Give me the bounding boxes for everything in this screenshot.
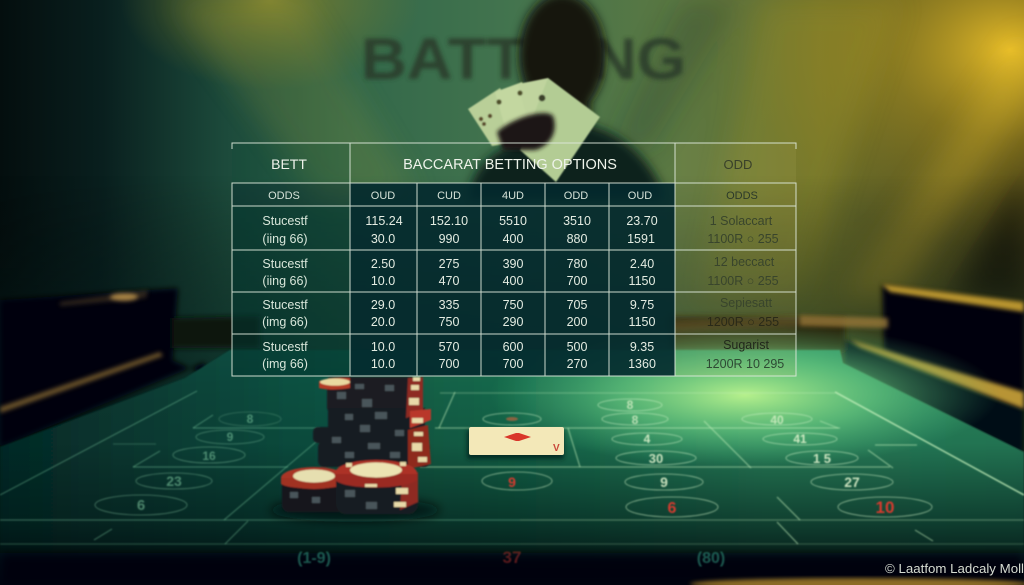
odds values: 3510 <box>563 214 591 228</box>
felt number markers: 23 <box>166 473 182 489</box>
row labels <box>262 214 308 371</box>
odds values: 2.40 <box>630 257 654 271</box>
table header row: BACCARAT BETTING OPTIONS <box>403 157 617 173</box>
felt number markers: 4 <box>644 432 651 446</box>
odds values: 115.24 <box>365 214 403 228</box>
felt number markers: 30 <box>649 451 663 466</box>
row labels: (img 66) <box>262 315 308 329</box>
odds values: 152.10 <box>430 214 468 228</box>
table subheader row: 4UD <box>502 190 524 202</box>
felt number markers: 41 <box>793 432 807 446</box>
odds values: 570 <box>439 340 459 354</box>
felt number markers: 9 <box>227 430 234 444</box>
odds values: 600 <box>503 340 523 354</box>
odds values: 400 <box>503 232 523 246</box>
right column details: 1200R 10 295 <box>706 357 784 371</box>
felt number markers: 9 <box>660 474 668 490</box>
odds values: 2.50 <box>371 257 395 271</box>
copyright watermark: © Laatfom Ladcaly Moll <box>885 562 1024 576</box>
felt number markers: 27 <box>844 474 860 490</box>
odds values: 750 <box>439 315 459 329</box>
odds values: 700 <box>439 357 459 371</box>
small front chip stack <box>281 467 347 512</box>
row labels: Stucestf <box>262 214 308 228</box>
odds values: 30.0 <box>371 232 395 246</box>
right column details: 12 beccact <box>714 255 775 269</box>
felt number markers: (1-9) <box>297 550 331 567</box>
table subheader row <box>268 190 758 202</box>
felt number markers: 1 5 <box>813 451 831 466</box>
icon: red diamond pip <box>504 433 531 441</box>
table subheader row: OUD <box>371 190 395 202</box>
odds values: 9.35 <box>630 340 654 354</box>
row labels: Stucestf <box>262 298 308 312</box>
felt number markers: 6 <box>137 497 145 514</box>
right column details <box>706 214 784 371</box>
table subheader row: ODDS <box>268 190 300 202</box>
odds values <box>365 214 658 371</box>
felt number markers: 8 <box>627 398 634 412</box>
odds values: 780 <box>567 257 587 271</box>
odds values: 700 <box>567 274 587 288</box>
felt number markers: (80) <box>697 550 725 567</box>
table subheader row: ODDS <box>726 190 758 202</box>
blurred wall lettering: BATTOING <box>361 27 686 92</box>
playing card on the table: V <box>553 443 560 454</box>
table subheader row: OUD <box>628 190 652 202</box>
felt table surface <box>0 323 1024 585</box>
odds values: 1150 <box>629 274 655 288</box>
odds values: 290 <box>503 315 523 329</box>
felt betting layout lines: left side <box>0 391 520 544</box>
odds values: 750 <box>503 298 523 312</box>
odds values: 20.0 <box>371 315 395 329</box>
front chip stack with cream top <box>335 460 418 514</box>
felt number markers: 9 <box>508 474 516 490</box>
odds values: 275 <box>439 257 459 271</box>
right column details: 1100R ○ 255 <box>707 274 779 288</box>
odds values: 10.0 <box>371 357 395 371</box>
right column details: Sepiesatt <box>720 296 773 310</box>
table panel fills <box>232 143 796 376</box>
tall chip stack <box>313 377 431 469</box>
felt number markers: 8 <box>632 413 639 427</box>
dealer silhouette holding cards <box>468 0 662 200</box>
odds values: 200 <box>567 315 587 329</box>
felt number markers: 8 <box>247 412 254 426</box>
felt number markers: 6 <box>668 500 677 517</box>
odds values: 705 <box>567 298 587 312</box>
odds values: 29.0 <box>371 298 395 312</box>
felt number markers: 10 <box>876 498 894 517</box>
odds values: 880 <box>567 232 587 246</box>
table grid <box>232 143 796 376</box>
table subheader row: CUD <box>437 190 461 202</box>
odds values: 400 <box>503 274 523 288</box>
odds values: 700 <box>503 357 523 371</box>
odds values: 1360 <box>628 357 656 371</box>
row labels: (img 66) <box>262 357 308 371</box>
odds values: 500 <box>567 340 587 354</box>
right column details: 1100R ○ 255 <box>707 232 779 246</box>
playing card on the table <box>467 427 564 459</box>
odds values: 270 <box>567 357 587 371</box>
right column details: 1200R ○ 255 <box>707 315 779 329</box>
odds values: 990 <box>439 232 459 246</box>
row labels: (iing 66) <box>262 232 308 246</box>
hand <box>497 113 555 150</box>
felt number markers <box>95 398 932 567</box>
row labels: Stucestf <box>262 340 308 354</box>
odds values: 335 <box>439 298 459 312</box>
odds values: 9.75 <box>630 298 654 312</box>
right column details: Sugarist <box>723 338 769 352</box>
stack of casino chips <box>270 377 440 522</box>
felt betting layout lines: right side <box>420 392 1024 544</box>
table subheader row: ODD <box>564 190 588 202</box>
side rails <box>0 284 1024 455</box>
table header row: BETT <box>271 156 307 172</box>
icon: fan of playing cards <box>468 78 600 182</box>
felt number markers: 40 <box>770 413 784 427</box>
odds values: 10.0 <box>371 274 395 288</box>
odds values: 470 <box>439 274 459 288</box>
felt number markers: 16 <box>202 449 216 463</box>
odds values: 390 <box>503 257 523 271</box>
odds values: 5510 <box>499 214 527 228</box>
table header row <box>271 156 752 173</box>
odds values: 10.0 <box>371 340 395 354</box>
row labels: Stucestf <box>262 257 308 271</box>
odds values: 1591 <box>627 232 655 246</box>
right column details: 1 Solaccart <box>710 214 773 228</box>
felt number markers: 37 <box>503 548 521 567</box>
table header row: ODD <box>724 157 752 172</box>
row labels: (iing 66) <box>262 274 308 288</box>
betting odds table <box>232 143 796 376</box>
odds values: 23.70 <box>626 214 658 228</box>
odds values: 1150 <box>629 315 655 329</box>
